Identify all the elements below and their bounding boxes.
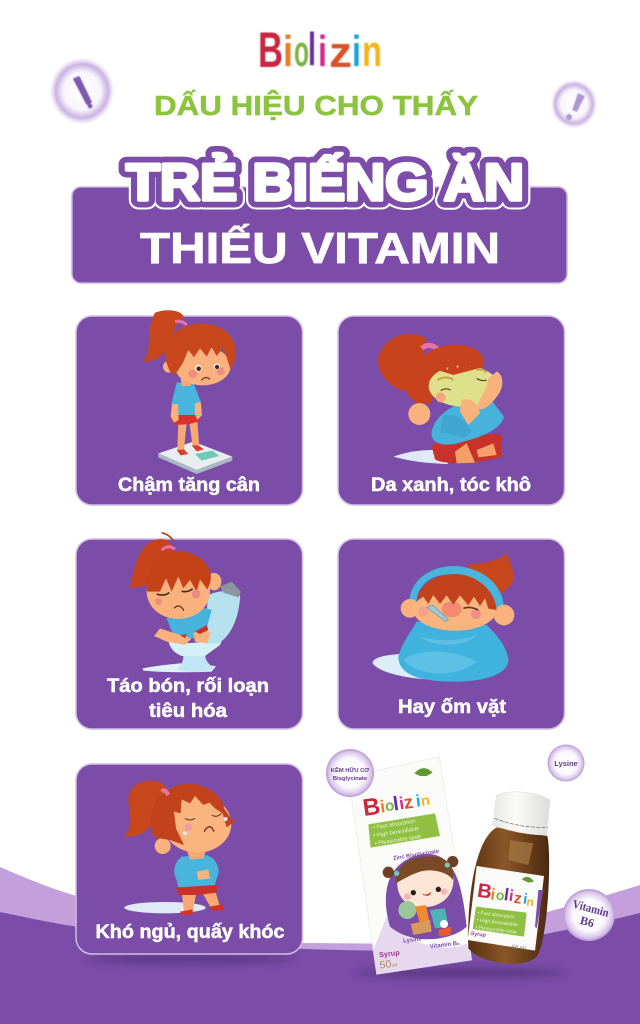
- product: Biolizin bottle: 50 ml: [511, 944, 526, 952]
- background wave: dark purple: [0, 912, 640, 1024]
- product: Biolizin box: o: [384, 797, 396, 815]
- product: Biolizin bottle: o: [495, 886, 506, 903]
- bubble icon: exclamation right: [551, 80, 597, 128]
- logo: Biolizin: l: [308, 23, 316, 75]
- icon: girl on toilet: [129, 533, 241, 672]
- product: Biolizin box: i: [398, 793, 405, 813]
- logo: Biolizin: [258, 22, 382, 78]
- product: Biolizin box: z: [402, 791, 414, 813]
- product: Biolizin bottle: n: [526, 894, 535, 909]
- product: Biolizin box: Syrup: [378, 948, 401, 959]
- title: Trẻ biếng ăn: TRẺ BIẾNG ĂN: [126, 153, 524, 212]
- product: Biolizin bottle: • Fast absorption: [477, 910, 515, 921]
- icon: girl covering face: [378, 334, 504, 464]
- product: Biolizin bottle: i: [522, 891, 528, 908]
- icon: girl in blanket: [373, 553, 514, 682]
- title: Trẻ biếng ăn: TRẺ BIẾNG ĂN: [126, 153, 524, 212]
- product shadow: [355, 968, 565, 978]
- product: Biolizin bottle: i: [489, 886, 496, 904]
- logo: Biolizin: i: [283, 27, 293, 76]
- logo: Biolizin: z: [329, 28, 352, 77]
- title banner: [72, 187, 567, 283]
- product: Biolizin bottle: • Pleasurable taste: [475, 925, 517, 936]
- product: Biolizin box: Lysine: [403, 936, 423, 945]
- bubble: Lysine: [548, 744, 584, 782]
- product: Biolizin box: B: [361, 793, 382, 822]
- bubble: Kẽm hữu cơ: [326, 749, 374, 797]
- panel: Chậm tăng cân: [76, 310, 302, 505]
- logo: Biolizin: i: [352, 27, 361, 76]
- panel: Hay ốm vặt: [338, 539, 564, 729]
- product: Biolizin bottle: • High bioavailable: [476, 917, 518, 928]
- background wave: light lilac: [0, 867, 640, 1024]
- product: Biolizin bottle: [468, 792, 550, 964]
- bubble icon: exclamation left: [50, 58, 114, 124]
- label: Da xanh, tóc khô: [371, 475, 531, 496]
- product: Biolizin bottle: i: [508, 888, 515, 905]
- bubble: Kẽm hữu cơ: Bisglycinate: [333, 776, 368, 782]
- panel: Da xanh, tóc khô: [338, 316, 564, 505]
- product: Biolizin bottle: l: [503, 884, 510, 905]
- subtitle: Dấu hiệu cho thấy: DẤU HIỆU CHO THẤY: [154, 90, 478, 121]
- logo: Biolizin: n: [362, 27, 382, 76]
- logo: Biolizin: i: [318, 27, 327, 76]
- title: Trẻ biếng ăn: TRẺ BIẾNG ĂN: [126, 153, 524, 212]
- bubble: Lysine: Lysine: [554, 759, 578, 768]
- label: Hay ốm vặt: [398, 697, 507, 718]
- product: Biolizin box: i: [379, 796, 386, 817]
- label: Táo bón, rối loạn: [107, 676, 269, 697]
- product: Biolizin box: 50ml: [379, 958, 398, 972]
- product: Biolizin box: [348, 757, 472, 974]
- bubble: Vitamin B6: Vitamin: [571, 897, 611, 920]
- bubble: Vitamin B6: B6: [579, 913, 596, 930]
- title: Thiếu vitamin: THIẾU VITAMIN: [140, 223, 500, 273]
- shadow under last panel: [85, 955, 295, 963]
- product: Biolizin bottle: B: [476, 880, 493, 904]
- product: Biolizin box: Zinc Bisglycinate: [393, 849, 440, 862]
- icon: girl on scale: [143, 310, 236, 474]
- panel: Khó ngủ, quấy khóc: [76, 764, 302, 954]
- panel: Táo bón, rối loạn tiêu hóa: [76, 533, 302, 729]
- logo: Biolizin: B: [258, 22, 283, 78]
- icon: crying girl: [124, 781, 237, 915]
- label: Khó ngủ, quấy khóc: [96, 922, 285, 943]
- label: Chậm tăng cân: [118, 475, 260, 496]
- product: Biolizin bottle: z: [513, 890, 523, 908]
- product: Biolizin box: • Fast absorption: [373, 819, 416, 831]
- product: Biolizin box: n: [420, 793, 431, 810]
- bubble: Kẽm hữu cơ: KẼM HỮU CƠ: [331, 767, 369, 774]
- product: Biolizin box: • Pleasurable taste: [374, 834, 422, 847]
- product: Biolizin bottle: Syrup: [470, 931, 487, 939]
- product: Biolizin box: i: [415, 791, 422, 811]
- logo: Biolizin: o: [294, 27, 309, 76]
- product: Biolizin box: l: [392, 793, 400, 816]
- product: Biolizin box: • High bioavailable: [373, 826, 420, 839]
- panel: Táo bón, rối loạn tiêu hóa: tiêu hóa: [149, 701, 227, 722]
- bubble: Vitamin B6: [563, 889, 615, 941]
- product: Biolizin box: Vitamin B₆: [430, 941, 461, 950]
